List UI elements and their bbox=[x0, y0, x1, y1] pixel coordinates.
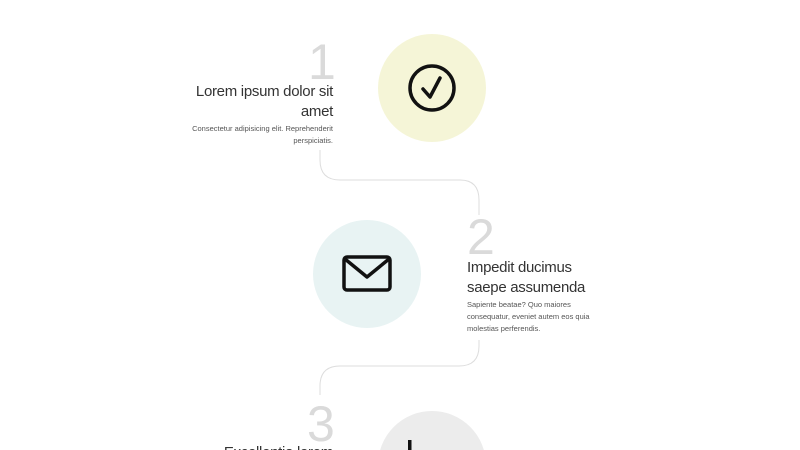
step 2 number: 2 bbox=[467, 209, 495, 265]
step 1 number: 1 bbox=[308, 34, 336, 90]
step 1 text: Lorem ipsum dolor sit amet bbox=[196, 83, 333, 120]
icon: envelope circle bbox=[313, 220, 421, 328]
step 1 text bbox=[192, 83, 334, 145]
icon: check circle bbox=[378, 34, 486, 142]
step 1 text: Consectetur adipisicing elit. Reprehenderit perspiciatis. bbox=[192, 124, 333, 145]
step 2 text: Impedit ducimus saepe assumenda bbox=[467, 259, 585, 296]
step 2 text bbox=[467, 259, 590, 333]
step 2 text: Sapiente beatae? Quo maiores consequatur, eveniet autem eos quia molestias perferendis. bbox=[467, 300, 590, 333]
icon: circle 3 bbox=[378, 411, 486, 450]
